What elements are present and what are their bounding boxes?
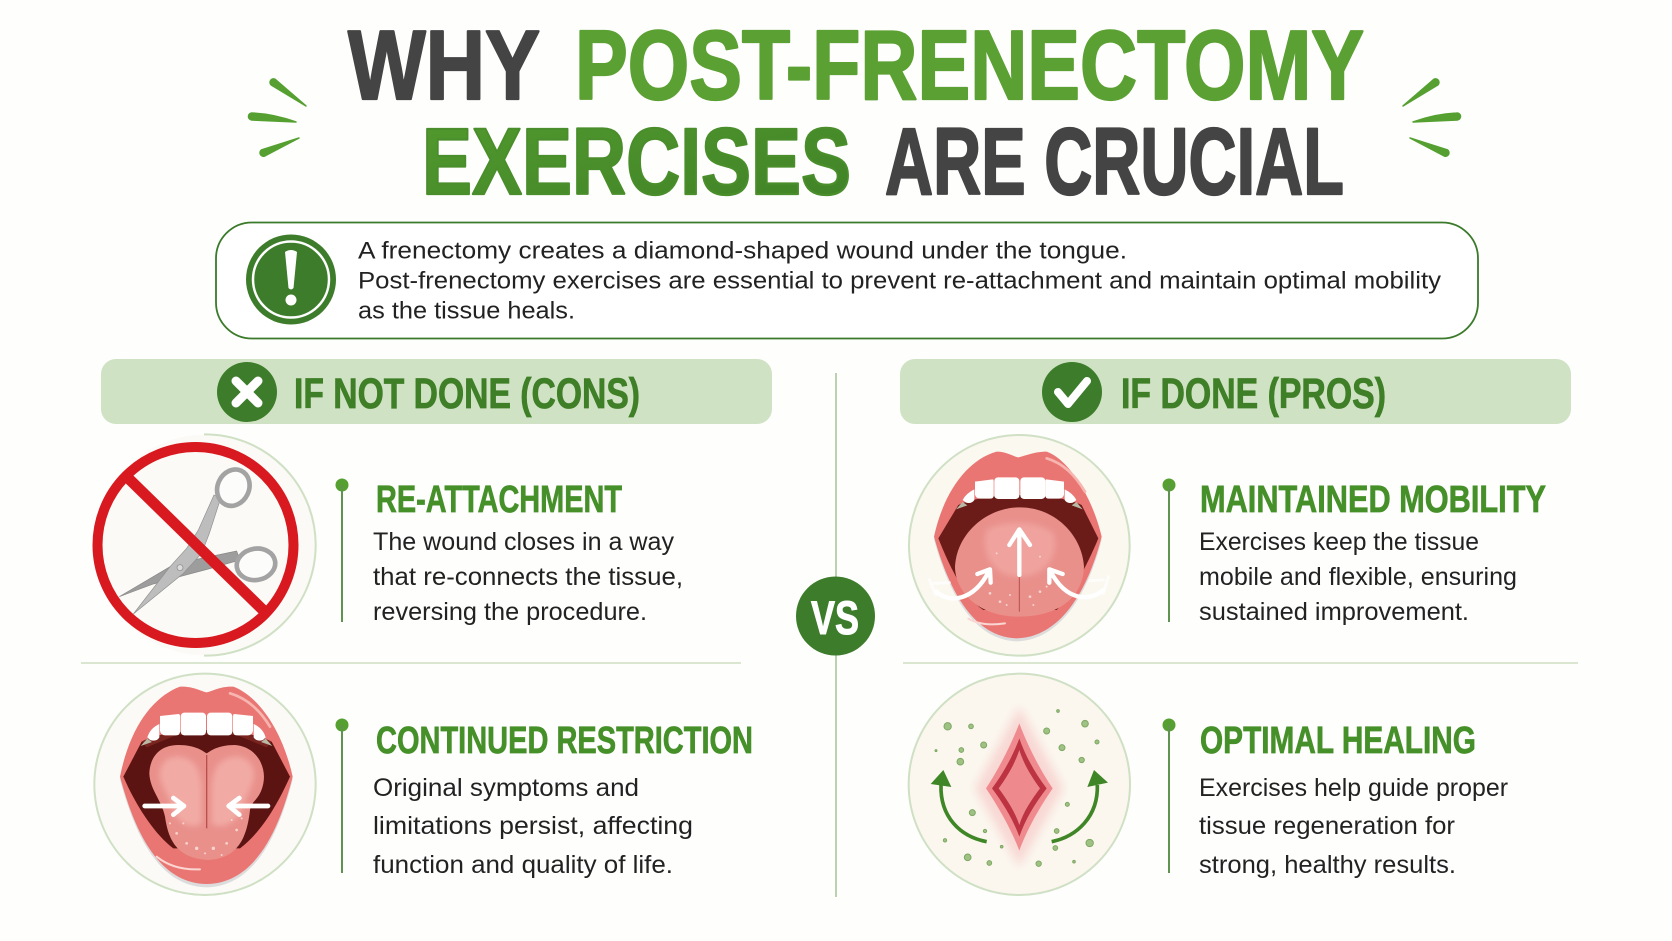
maintained mobility marker <box>1162 478 1176 622</box>
icon: exclamation badge <box>246 234 336 324</box>
text: re-attachment: The wound closes in a way <box>373 528 674 556</box>
panel header: cons: IF NOT DONE (CONS) <box>294 370 640 418</box>
teeth <box>963 477 1076 503</box>
icon: check badge <box>1042 362 1102 422</box>
scissors <box>119 464 278 614</box>
title: POST-FRENECTOMY <box>575 10 1364 120</box>
re-attachment marker <box>336 478 348 622</box>
text: continued restriction <box>373 720 753 879</box>
text: maintained mobility: sustained improvement. <box>1199 598 1469 626</box>
text: maintained mobility: Exercises keep the tissue <box>1199 528 1479 556</box>
title: WHY <box>348 10 540 120</box>
title: EXERCISES <box>422 109 851 215</box>
panel: intro callout <box>216 222 1478 338</box>
text: optimal healing: Exercises help guide proper <box>1199 774 1508 802</box>
callout text: as the tissue heals. <box>358 298 575 324</box>
arrows <box>145 798 268 815</box>
teeth <box>147 713 266 741</box>
text: maintained mobility <box>1199 479 1546 626</box>
text: re-attachment: reversing the procedure. <box>373 598 647 626</box>
title: ARE CRUCIAL <box>885 109 1344 215</box>
icon: left accent sparks <box>248 79 306 156</box>
optimal healing marker <box>1162 718 1176 873</box>
continued restriction marker <box>336 718 348 873</box>
text: maintained mobility: MAINTAINED MOBILITY <box>1200 479 1546 521</box>
icon: healing wound <box>909 674 1130 895</box>
text: continued restriction: function and quality of life. <box>373 851 673 879</box>
VS badge: VS <box>811 591 859 644</box>
callout text: A frenectomy creates a diamond-shaped wound under the tongue. <box>358 238 1127 264</box>
panel header: pros: IF DONE (PROS) <box>1121 370 1386 418</box>
VS badge <box>796 576 875 656</box>
horizontal rule right <box>903 662 1578 664</box>
center divider <box>835 373 837 897</box>
growth arrows <box>931 770 1108 842</box>
text: continued restriction: limitations persist, affecting <box>373 812 693 840</box>
icon: right accent sparks <box>1403 79 1461 156</box>
horizontal rule left <box>81 662 741 664</box>
title <box>348 10 1364 215</box>
icon: no scissors <box>95 434 316 656</box>
text: re-attachment <box>373 479 683 626</box>
icon: x badge <box>217 362 277 422</box>
arrows <box>929 529 1108 598</box>
text: optimal healing: OPTIMAL HEALING <box>1200 720 1476 762</box>
text: optimal healing: tissue regeneration for <box>1199 812 1455 840</box>
text: re-attachment: that re-connects the tissue, <box>373 563 683 591</box>
panel header: cons <box>101 359 772 424</box>
text: re-attachment: RE-ATTACHMENT <box>376 479 622 521</box>
cell dots <box>935 710 1099 866</box>
text: continued restriction: CONTINUED RESTRICTION <box>376 720 753 762</box>
text: maintained mobility: mobile and flexible, ensuring <box>1199 563 1517 591</box>
callout text <box>358 238 1442 324</box>
panel header: pros <box>900 359 1571 424</box>
text: optimal healing <box>1199 720 1508 879</box>
text: optimal healing: strong, healthy results. <box>1199 851 1456 879</box>
text: continued restriction: Original symptoms and <box>373 774 639 802</box>
icon: mobile tongue <box>909 435 1130 656</box>
callout text: Post-frenectomy exercises are essential to prevent re-attachment and maintain optimal mobility <box>358 268 1442 294</box>
icon: restricted tongue <box>94 674 316 895</box>
